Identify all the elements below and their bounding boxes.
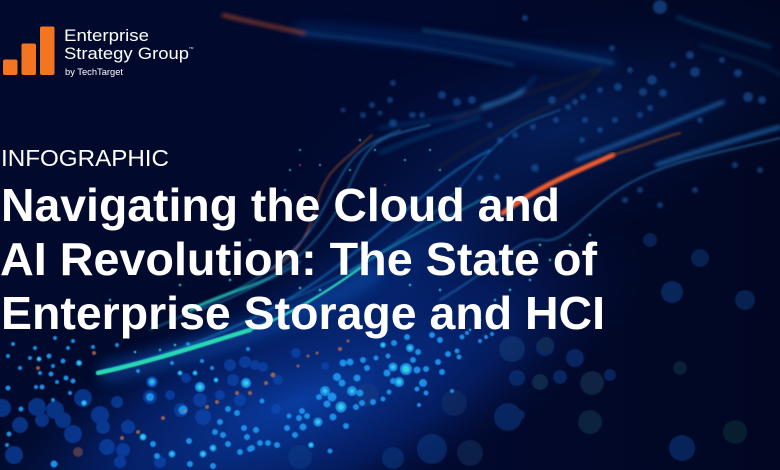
icon: orange bars — [3, 26, 54, 75]
logo wordmark: by TechTarget — [65, 67, 123, 78]
eyebrow label: INFOGRAPHIC — [1, 145, 169, 171]
light ribbons — [98, 15, 780, 373]
logo wordmark: Strategy Group — [64, 44, 189, 63]
title: Navigating the Cloud and — [1, 179, 560, 231]
particle field: dark bokeh — [288, 233, 755, 469]
particle field: bright blue dots — [5, 331, 494, 469]
logo wordmark: Enterprise — [64, 26, 149, 45]
particle field: cyan highlights — [38, 139, 591, 456]
particle field: upper right blurred dots — [340, 0, 766, 208]
logo wordmark: TM — [189, 46, 194, 50]
title: AI Revolution: The State of — [0, 233, 598, 285]
title — [0, 179, 605, 339]
particle field: warm dots — [36, 164, 386, 457]
logo wordmark — [64, 26, 194, 78]
title: Enterprise Storage and HCI — [1, 287, 605, 339]
particle field: blue bokeh left — [0, 348, 329, 468]
logo — [3, 26, 194, 78]
